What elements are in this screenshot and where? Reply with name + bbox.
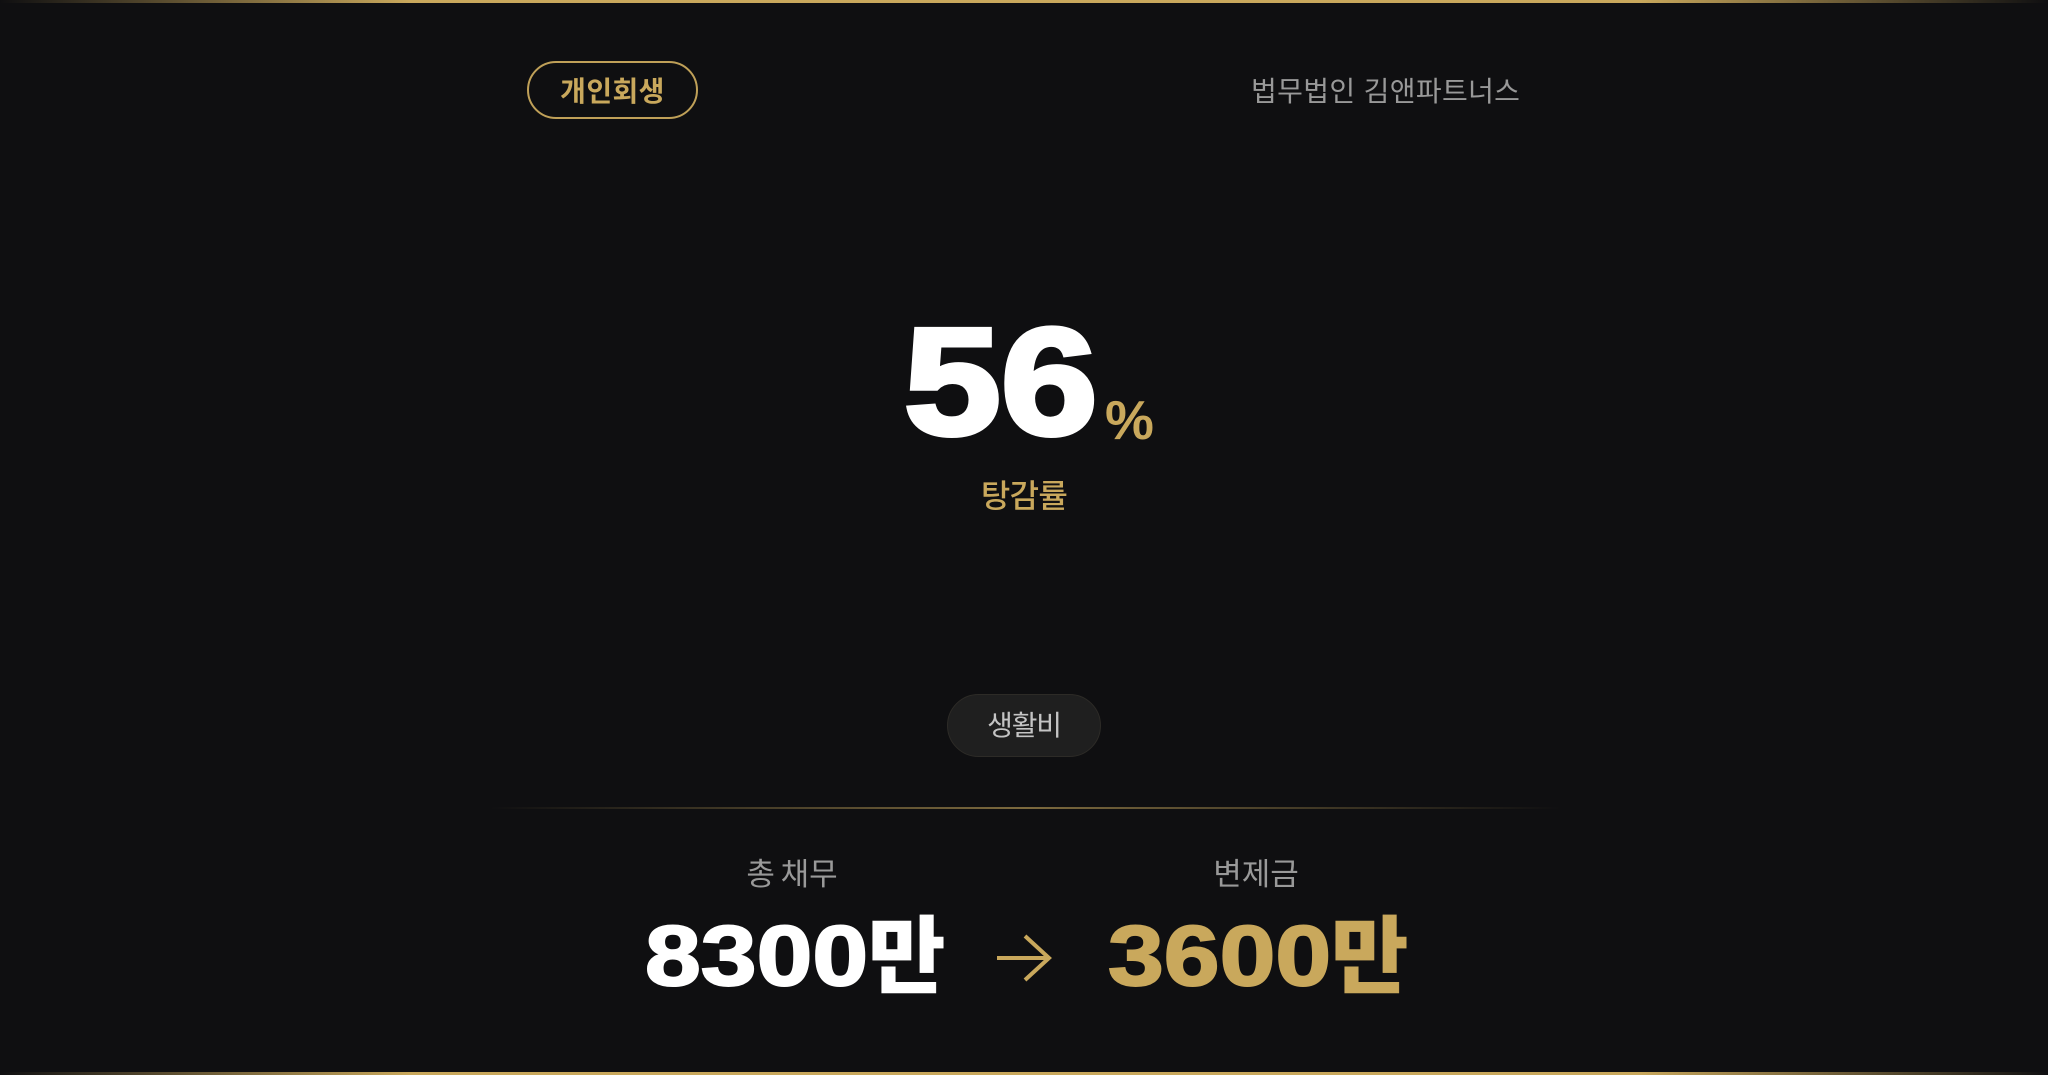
category badge (527, 61, 698, 119)
total debt label: 총 채무 (746, 849, 838, 894)
percent sign: % (1105, 389, 1154, 451)
arrow (997, 934, 1052, 982)
rate label: 탕감률 (981, 471, 1067, 517)
repayment label: 변제금 (1213, 849, 1299, 894)
bottom gold bar (0, 1072, 2048, 1075)
number 56: 56 (904, 297, 1098, 467)
divider (490, 807, 1560, 809)
repayment amount: 3600 (1108, 909, 1331, 1004)
total debt column (645, 849, 945, 1011)
headline rate (904, 297, 1154, 467)
law firm name: 법무법인 김앤파트너스 (1251, 70, 1520, 110)
total debt amount: 만 (868, 890, 945, 1011)
total debt amount (645, 890, 945, 1011)
category badge: 개인회생 (560, 70, 665, 110)
tag: living expenses (947, 694, 1101, 757)
total debt amount: 8300 (645, 909, 868, 1004)
top gold bar (0, 0, 2048, 3)
tag: living expenses: 생활비 (987, 704, 1061, 744)
repayment column (1108, 849, 1408, 1011)
repayment amount (1108, 890, 1408, 1011)
repayment amount: 만 (1331, 890, 1408, 1011)
